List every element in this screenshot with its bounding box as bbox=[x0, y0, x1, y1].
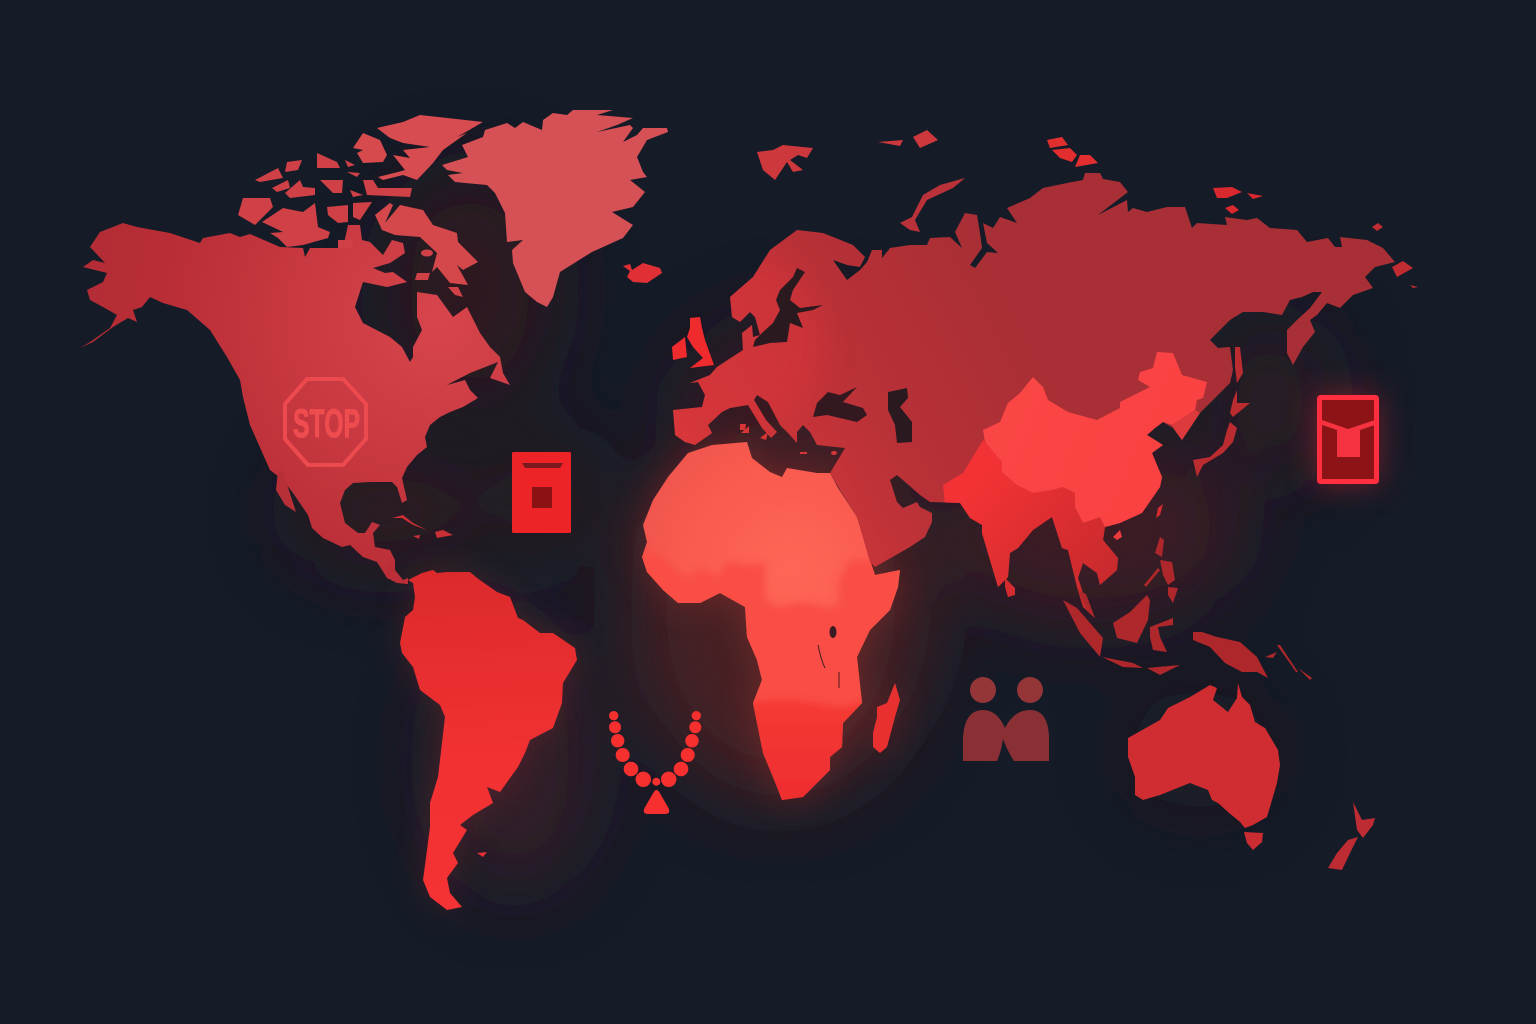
New Siberian Islands bbox=[1213, 187, 1242, 198]
Svalbard bbox=[757, 145, 813, 180]
lakes bbox=[830, 626, 836, 638]
band: west and central Africa bbox=[640, 540, 900, 720]
region: inland seas bbox=[753, 268, 912, 443]
region: Tasmania bbox=[1244, 832, 1263, 850]
band: southern Africa bbox=[753, 698, 862, 800]
region: South America bbox=[400, 570, 577, 910]
necklace pendant bbox=[644, 790, 669, 814]
envelope flap bbox=[1322, 420, 1375, 457]
region: Greenland bbox=[442, 110, 668, 307]
postbox slot bbox=[522, 463, 563, 468]
region: Philippines and Indonesia bbox=[1063, 537, 1312, 680]
region: Sri Lanka, Hainan and Taiwan bbox=[1005, 504, 1163, 597]
stop sign text: STOP bbox=[293, 402, 360, 446]
icon: necklace bbox=[609, 711, 701, 814]
Novaya Zemlya bbox=[900, 178, 965, 232]
Baja California bbox=[276, 470, 296, 512]
region: Canadian Arctic islands bbox=[238, 115, 483, 297]
people bodies bbox=[963, 710, 1049, 761]
Franz Josef Land bbox=[878, 140, 903, 146]
Caribbean islands bbox=[392, 515, 453, 539]
Korea bbox=[1172, 410, 1200, 440]
background glow behind land bbox=[290, 170, 1330, 890]
region: China bbox=[983, 352, 1207, 527]
region: Africa bbox=[630, 430, 910, 810]
region: Arctic islands bbox=[757, 130, 1418, 288]
icon: envelope card bbox=[1320, 398, 1376, 482]
region: India and Southeast Asia bbox=[943, 440, 1118, 618]
region: New Zealand bbox=[1328, 802, 1375, 870]
Wrangel and Bering islands bbox=[1372, 223, 1383, 231]
Severnaya Zemlya bbox=[1047, 137, 1068, 148]
region: Iceland bbox=[623, 263, 662, 283]
icon: stop sign bbox=[285, 379, 366, 465]
region: North America bbox=[80, 223, 510, 584]
icon: red postbox bbox=[512, 452, 571, 533]
region: Mediterranean islands bbox=[740, 424, 837, 455]
region: Japan and Sakhalin bbox=[1193, 347, 1250, 477]
highlight: western Europe and Scandinavia bbox=[680, 251, 822, 428]
icon: two people bbox=[963, 677, 1049, 761]
Falkland Islands bbox=[477, 852, 487, 857]
postbox square bbox=[532, 487, 552, 508]
region: British Isles bbox=[672, 317, 714, 368]
region: Eurasia bbox=[655, 173, 1395, 640]
region: Australia bbox=[1128, 683, 1280, 828]
infographic: world map with icons bbox=[80, 110, 1418, 914]
Madagascar bbox=[873, 683, 900, 753]
